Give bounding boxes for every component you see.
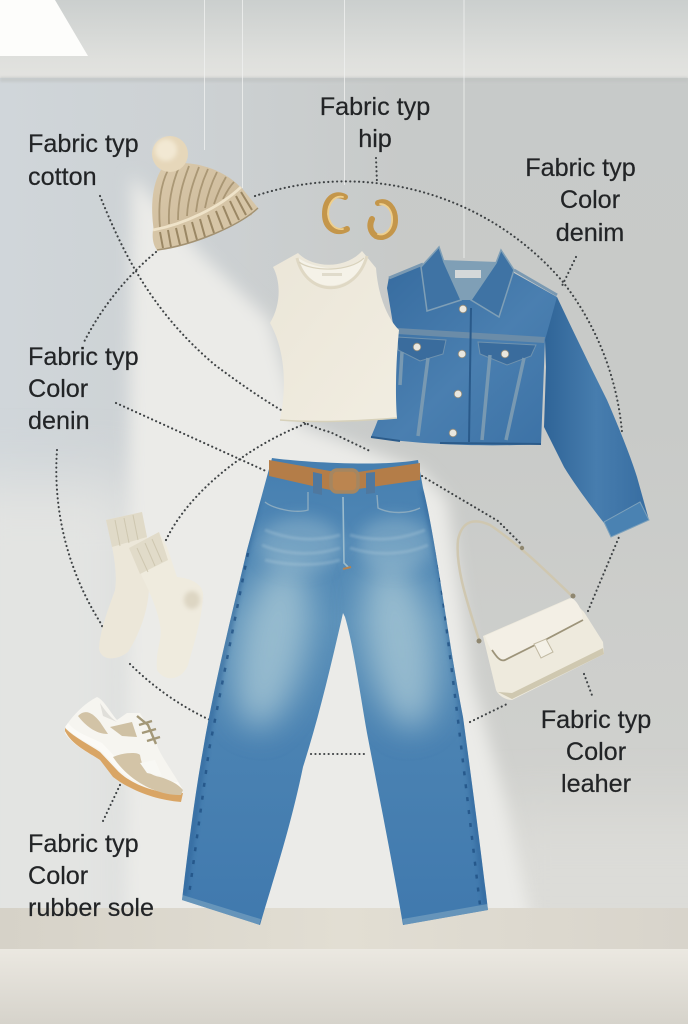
icon: high-waisted jeans with tan belt <box>182 458 488 925</box>
label: sneaker <box>28 830 154 922</box>
icon: ribbed socks <box>99 512 203 678</box>
label: sneaker: Color <box>28 862 88 890</box>
label: beanie: Fabric typ <box>28 130 139 158</box>
label: jacket: Fabric typ <box>525 154 636 182</box>
icon: gold hoop earrings <box>325 195 395 237</box>
label: beanie <box>28 130 139 191</box>
icon: ribbed tank top <box>270 251 399 421</box>
label: earrings <box>320 93 430 153</box>
label: jacket: Color <box>560 186 620 214</box>
label: earrings: hip <box>358 125 392 153</box>
icon: cropped denim jacket <box>371 247 649 537</box>
icon: sneaker <box>65 697 183 802</box>
skylight patch on ceiling <box>0 0 88 56</box>
label: sneaker: rubber sole <box>28 894 154 922</box>
hanging strings <box>204 0 464 258</box>
label: jeans: Color <box>28 375 88 403</box>
label: jacket: denim <box>556 219 624 247</box>
label: jeans: Fabric typ <box>28 343 139 371</box>
label: jacket <box>525 154 636 247</box>
icon: beanie hat <box>152 136 258 250</box>
label: sneaker: Fabric typ <box>28 830 139 858</box>
label: bag <box>541 706 651 798</box>
dotted connector circle and leader lines <box>56 158 622 821</box>
label: bag: Fabric typ <box>541 706 651 734</box>
label: beanie: cotton <box>28 163 97 191</box>
label: jeans: denin <box>28 407 90 435</box>
label: jeans <box>28 343 139 435</box>
label: bag: Color <box>566 738 626 766</box>
icon: cream shoulder bag <box>458 521 604 700</box>
label: bag: leaher <box>561 770 631 798</box>
label: earrings: Fabric typ <box>320 93 430 121</box>
